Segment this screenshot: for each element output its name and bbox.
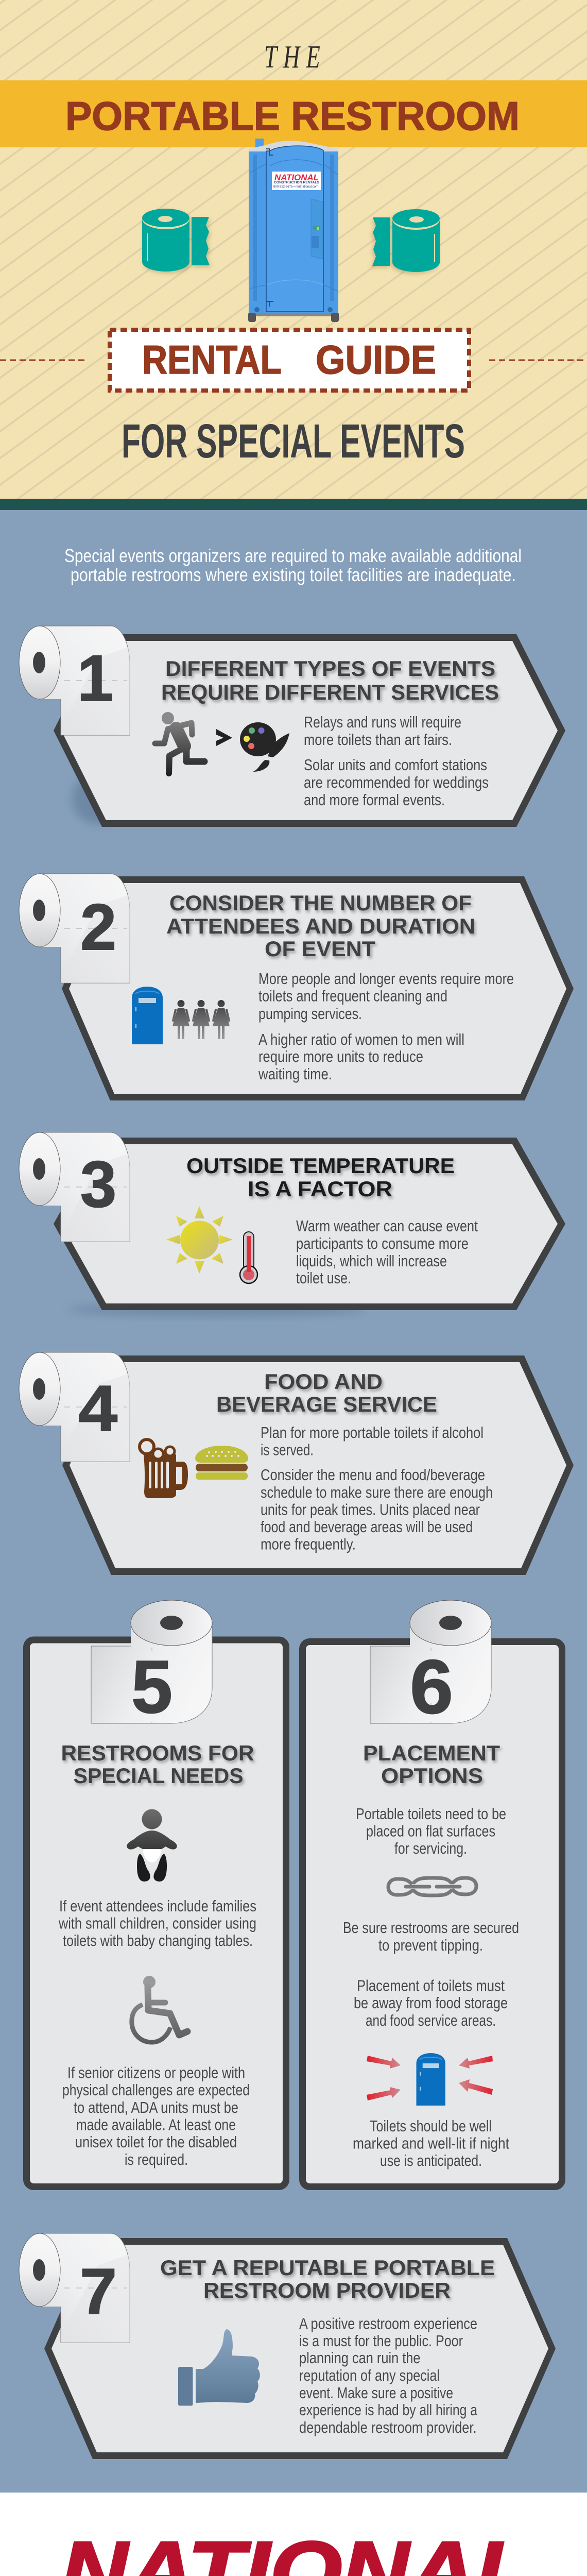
heading: IS A FACTOR bbox=[248, 1177, 392, 1201]
heading: RESTROOM PROVIDER bbox=[203, 2278, 451, 2302]
icon: three women bbox=[172, 1000, 230, 1039]
title band: PORTABLE RESTROOM bbox=[65, 93, 520, 139]
body text: well marked: Toilets should be well bbox=[370, 2117, 492, 2135]
panel: step 5 bbox=[27, 1600, 286, 2187]
heading: FOOD AND bbox=[264, 1369, 383, 1394]
heading: OPTIONS bbox=[381, 1764, 483, 1788]
body text: dependable restroom provider. bbox=[299, 2418, 477, 2436]
body text: more frequently. bbox=[261, 1535, 356, 1553]
body text: Solar units and comfort stations bbox=[304, 756, 487, 774]
heading: the: THE bbox=[264, 39, 320, 75]
side dashes right bbox=[489, 360, 587, 361]
heading: PLACEMENT bbox=[363, 1741, 500, 1765]
sticker: CONSTRUCTION RENTALS bbox=[274, 181, 320, 184]
roll with number 2: 2 bbox=[80, 891, 116, 963]
body text: ADA: unisex toilet for the disabled bbox=[75, 2133, 237, 2151]
heading: SPECIAL NEEDS bbox=[73, 1764, 243, 1788]
heading: BEVERAGE SERVICE bbox=[216, 1392, 437, 1416]
body text: flat surfaces: for servicing. bbox=[394, 1839, 467, 1857]
rental guide box bbox=[110, 330, 469, 391]
icon: greater-than sign bbox=[216, 729, 232, 746]
body text: ADA: is required. bbox=[125, 2150, 188, 2168]
body text: toilet use. bbox=[296, 1269, 351, 1287]
roll with number 4: 4 bbox=[78, 1372, 117, 1445]
icon: chain bbox=[388, 1878, 476, 1895]
body text: reputation of any special bbox=[299, 2366, 440, 2384]
body text: A positive restroom experience bbox=[299, 2314, 477, 2333]
sticker: 800-352-5675 • rentnational.com bbox=[273, 185, 318, 189]
body text: families: If event attendees include families bbox=[59, 1897, 256, 1915]
body text: well marked: use is anticipated. bbox=[380, 2151, 482, 2170]
body text: is a must for the public. Poor bbox=[299, 2332, 463, 2350]
body text: ADA: If senior citizens or people with bbox=[67, 2064, 245, 2081]
body text bbox=[296, 1217, 478, 1287]
icon: right teal paper roll bbox=[372, 209, 440, 272]
body text bbox=[304, 713, 489, 809]
body text: flat surfaces: Portable toilets need to be bbox=[356, 1805, 506, 1823]
icon: runner bbox=[155, 712, 204, 773]
body text: waiting time. bbox=[258, 1065, 332, 1083]
body text: schedule to make sure there are enough bbox=[261, 1483, 493, 1501]
body text: flat surfaces: placed on flat surfaces bbox=[366, 1822, 495, 1840]
icon: sun bbox=[166, 1206, 233, 1274]
body text: ADA: made available. At least one bbox=[76, 2115, 236, 2134]
panel: step 1 bbox=[19, 626, 565, 827]
body text: Plan for more portable toilets if alcohol bbox=[261, 1423, 484, 1442]
roll with number 2 bbox=[19, 874, 130, 983]
heading: OUTSIDE TEMPERATURE bbox=[186, 1154, 455, 1178]
body text: well marked: marked and well-lit if night bbox=[353, 2134, 509, 2153]
heading: REQUIRE DIFFERENT SERVICES bbox=[161, 680, 499, 704]
panel: step 3 bbox=[19, 1132, 565, 1317]
body text: are recommended for weddings bbox=[304, 773, 489, 791]
icon: thumbs up bbox=[178, 2329, 260, 2406]
heading: GET A REPUTABLE PORTABLE bbox=[160, 2256, 495, 2280]
panel: step 6 bbox=[303, 1600, 562, 2187]
body text: away from food: and food service areas. bbox=[366, 2011, 496, 2029]
icon: burger bbox=[195, 1446, 248, 1480]
body text: secured: Be sure restrooms are secured bbox=[343, 1919, 519, 1937]
icon: blue toilet bbox=[132, 987, 163, 1044]
heading: RESTROOMS FOR bbox=[61, 1741, 254, 1765]
body text: more toilets than art fairs. bbox=[304, 731, 452, 749]
body text: and more formal events. bbox=[304, 791, 445, 809]
body text: away from food: be away from food storage bbox=[354, 1994, 508, 2012]
green divider band bbox=[0, 499, 587, 510]
panel: step 2 bbox=[19, 874, 574, 1100]
roll with number 1 bbox=[19, 626, 130, 735]
sticker: NATIONAL bbox=[274, 173, 319, 182]
icon: wheelchair bbox=[132, 1976, 187, 2042]
icon: left teal paper roll bbox=[142, 209, 210, 272]
icon: palette and brush bbox=[240, 722, 289, 772]
icon: thermometer bbox=[240, 1232, 257, 1283]
body text: A higher ratio of women to men will bbox=[258, 1030, 464, 1048]
heading: ATTENDEES AND DURATION bbox=[166, 914, 475, 938]
illustration: portable toilet bbox=[248, 139, 339, 322]
heading: CONSIDER THE NUMBER OF bbox=[169, 891, 472, 915]
body text: Relays and runs will require bbox=[304, 713, 461, 731]
body text bbox=[299, 2314, 478, 2436]
body text: Consider the menu and food/beverage bbox=[261, 1466, 485, 1484]
body text: families: with small children, consider using bbox=[58, 1914, 256, 1932]
body text: is served. bbox=[261, 1440, 314, 1459]
body text: event. Make sure a positive bbox=[299, 2384, 453, 2402]
body text: well marked bbox=[353, 2117, 509, 2170]
body text: away from food: Placement of toilets must bbox=[357, 1976, 505, 1995]
body text: toilets and frequent cleaning and bbox=[258, 987, 447, 1005]
roll with number 3: 3 bbox=[80, 1148, 116, 1221]
body text: units for peak times. Units placed near bbox=[261, 1500, 480, 1519]
heading bbox=[363, 1741, 500, 1788]
icon: baby bbox=[127, 1809, 177, 1882]
roll with number 5 bbox=[91, 1600, 212, 1728]
title band bbox=[0, 80, 587, 147]
body text: ADA bbox=[62, 2064, 250, 2168]
body text: food and beverage areas will be used bbox=[261, 1518, 473, 1536]
body text: families: toilets with baby changing tables. bbox=[63, 1931, 253, 1950]
roll with number 7 bbox=[19, 2233, 130, 2343]
body text: pumping services. bbox=[258, 1005, 362, 1023]
icon: beer mug bbox=[140, 1439, 188, 1498]
roll with number 7: 7 bbox=[80, 2255, 117, 2328]
body text: ADA: physical challenges are expected bbox=[62, 2081, 250, 2099]
roll with number 6 bbox=[370, 1600, 491, 1730]
icon: toilet with red arrows bbox=[367, 2053, 493, 2106]
body text: secured: to prevent tipping. bbox=[378, 1936, 483, 1954]
heading: DIFFERENT TYPES OF EVENTS bbox=[165, 656, 495, 681]
panel: step 7 bbox=[19, 2233, 556, 2459]
intro text: portable restrooms where existing toilet facilities are inadequate. bbox=[71, 564, 516, 585]
rental guide box: RENTAL bbox=[142, 337, 282, 382]
body text: experience is had by all hiring a bbox=[299, 2401, 478, 2419]
body text: flat surfaces bbox=[356, 1805, 506, 1857]
body text: Warm weather can cause event bbox=[296, 1217, 478, 1235]
body text: require more units to reduce bbox=[258, 1047, 423, 1065]
roll with number 6: 6 bbox=[410, 1645, 453, 1730]
panel: step 4 bbox=[19, 1352, 574, 1575]
heading bbox=[160, 2256, 495, 2302]
heading bbox=[61, 1741, 254, 1788]
heading bbox=[161, 656, 499, 704]
heading bbox=[166, 891, 475, 961]
body text: secured bbox=[343, 1919, 519, 1954]
body text: participants to consume more bbox=[296, 1234, 469, 1252]
side dashes left bbox=[0, 360, 87, 361]
body text bbox=[258, 970, 514, 1083]
roll with number 3 bbox=[19, 1132, 130, 1242]
heading: OF EVENT bbox=[265, 937, 375, 961]
body text: liquids, which will increase bbox=[296, 1252, 447, 1270]
roll with number 1: 1 bbox=[77, 642, 113, 715]
body text: away from food bbox=[354, 1976, 508, 2029]
blue background bbox=[0, 510, 587, 2493]
body text bbox=[261, 1423, 493, 1553]
heading bbox=[186, 1154, 455, 1201]
body text: families bbox=[58, 1897, 256, 1950]
intro text bbox=[64, 545, 522, 585]
heading bbox=[216, 1369, 437, 1416]
body text: ADA: to attend, ADA units must be bbox=[74, 2098, 238, 2116]
rental guide box: GUIDE bbox=[316, 337, 436, 382]
roll with number 4 bbox=[19, 1352, 130, 1462]
roll with number 5: 5 bbox=[131, 1645, 172, 1728]
sticker bbox=[272, 172, 321, 190]
body text: More people and longer events require more bbox=[258, 970, 514, 988]
panel: hero header bbox=[0, 0, 587, 499]
body text: planning can ruin the bbox=[299, 2349, 420, 2367]
